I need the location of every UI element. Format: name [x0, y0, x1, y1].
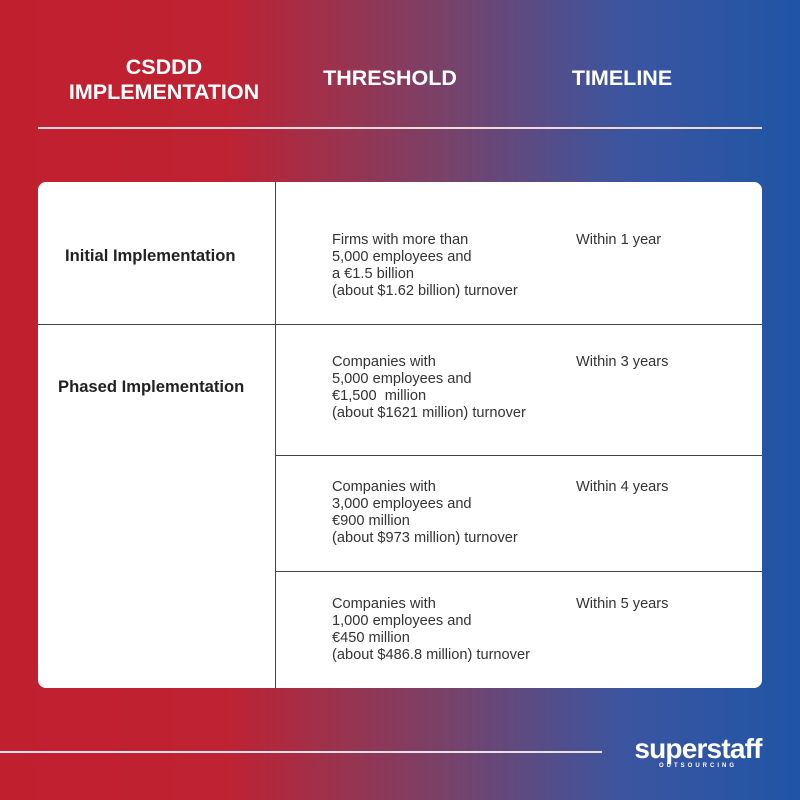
threshold 4: Companies with — [332, 596, 436, 612]
threshold 2: (about $1621 million) turnover — [332, 405, 526, 421]
threshold 3: €900 million — [332, 513, 410, 529]
logo: OUTSOURCING — [659, 763, 737, 769]
threshold 1: (about $1.62 billion) turnover — [332, 283, 518, 299]
threshold 3: Companies with — [332, 479, 436, 495]
threshold 1: a €1.5 billion — [332, 266, 414, 282]
threshold 2 — [332, 354, 526, 421]
threshold 3: (about $973 million) turnover — [332, 530, 518, 546]
timeline 1: Within 1 year — [576, 232, 661, 248]
header: CSDDD implementation: CSDDD — [126, 55, 202, 79]
header: CSDDD implementation: IMPLEMENTATION — [69, 80, 259, 104]
header: timeline: TIMELINE — [572, 66, 672, 90]
threshold 4 — [332, 596, 530, 663]
threshold 4: 1,000 employees and — [332, 613, 472, 629]
threshold 1: Firms with more than — [332, 232, 468, 248]
row label: phased: Phased Implementation — [58, 377, 244, 396]
threshold 1: 5,000 employees and — [332, 249, 472, 265]
threshold 2: €1,500 million — [332, 388, 426, 404]
threshold 2: Companies with — [332, 354, 436, 370]
header: threshold: THRESHOLD — [323, 66, 457, 90]
table panel — [38, 182, 762, 688]
threshold 4: (about $486.8 million) turnover — [332, 647, 530, 663]
timeline 3: Within 4 years — [576, 479, 668, 495]
header: CSDDD implementation — [69, 55, 259, 104]
timeline 4: Within 5 years — [576, 596, 668, 612]
threshold 3 — [332, 479, 518, 546]
threshold 1 — [332, 232, 518, 299]
threshold 4: €450 million — [332, 630, 410, 646]
row label: initial: Initial Implementation — [65, 246, 236, 265]
timeline 2: Within 3 years — [576, 354, 668, 370]
logo: superstaff — [634, 733, 762, 764]
threshold 2: 5,000 employees and — [332, 371, 472, 387]
threshold 3: 3,000 employees and — [332, 496, 472, 512]
